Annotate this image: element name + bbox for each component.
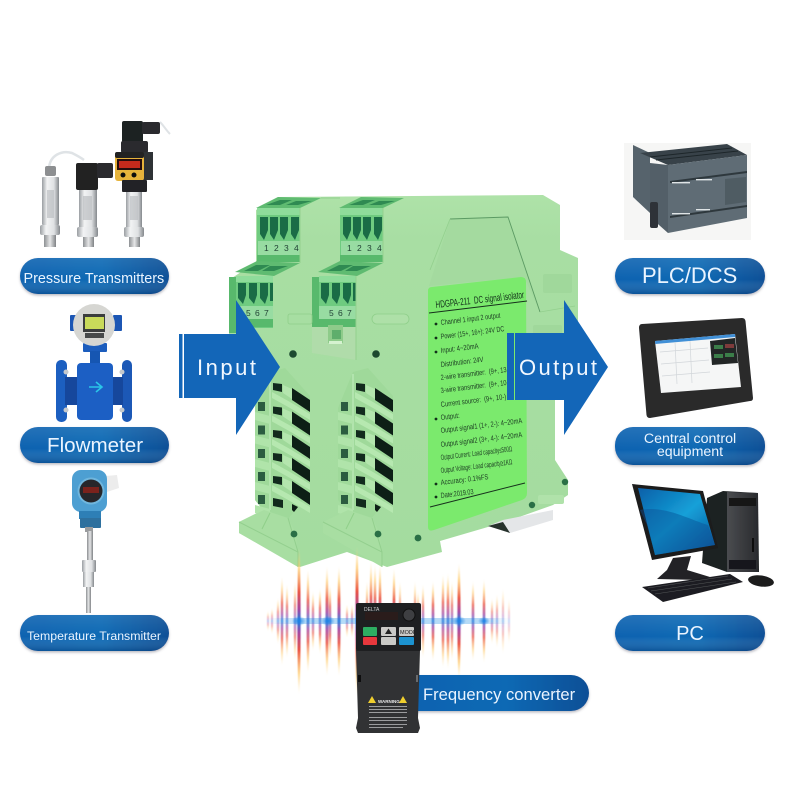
specification text: Output signal1 (1+, 2-): 4~20mA xyxy=(440,416,523,435)
specification text: Power (15+, 16+): 24V DC xyxy=(440,324,505,341)
device body silhouette xyxy=(229,195,578,567)
panel edge lines xyxy=(300,198,383,360)
arrow: input: Input xyxy=(197,355,256,380)
icon: frequency converter xyxy=(356,603,421,733)
label: frequency converter xyxy=(405,675,589,711)
specification text: Channel 1 input 2 output xyxy=(440,311,501,327)
icon: frequency converter: MODE xyxy=(400,630,417,636)
chart: interference waveform xyxy=(267,546,510,696)
connector 5-7, module 2: 7 xyxy=(347,308,352,318)
label: central control equipment xyxy=(615,427,765,465)
icon: frequency converter: WARNING xyxy=(378,699,400,704)
label: pressure transmitters: Pressure Transmitters xyxy=(24,271,164,287)
arrow: input xyxy=(179,300,280,435)
connector 1-4, module 2 xyxy=(339,197,404,262)
label: flowmeter xyxy=(20,427,169,463)
label: PLC/DCS xyxy=(615,258,765,294)
connector 5-7, module 2: 5 xyxy=(329,308,334,318)
slot shadow xyxy=(488,522,510,533)
icon: desktop PC xyxy=(632,484,775,602)
connector 1-4, module 1: 1 xyxy=(264,243,269,253)
specification text: 2-wire transmitter: (9+, 13-) xyxy=(440,364,511,382)
label: PLC/DCS: PLC/DCS xyxy=(642,263,737,288)
connector 5-7, module 1: 7 xyxy=(264,308,269,318)
label: PC xyxy=(615,615,765,651)
arrow: output: Output xyxy=(519,355,597,380)
connector 1-4, module 2: 3 xyxy=(367,243,372,253)
label title: HDGPA-211 DC signal isolator xyxy=(435,290,525,311)
specification text: Input: 4~20mA xyxy=(440,341,479,355)
recess above label xyxy=(429,217,575,312)
connector 1-4, module 1: 2 xyxy=(274,243,279,253)
metal DIN clip xyxy=(488,510,553,533)
specification text xyxy=(440,311,523,500)
connector 1-4, module 1 xyxy=(256,197,321,262)
specification text: Date:2019.03 xyxy=(440,487,474,500)
specification text: Output Current: Load capacity≤500Ω xyxy=(440,444,513,462)
specification text: Accuracy: 0.1%FS xyxy=(440,472,489,487)
foot, module 2 xyxy=(323,510,382,567)
connector 5-7, module 1: 5 xyxy=(246,308,251,318)
vent slats, module 2 xyxy=(338,368,393,519)
arrow: output xyxy=(507,300,608,435)
specification text: Output Voltage: Load capacity≥1KΩ xyxy=(440,457,513,475)
module 2 latch block xyxy=(312,325,356,360)
label: central control equipment: Central control xyxy=(644,431,736,447)
connector 5-7, module 2: 6 xyxy=(338,308,343,318)
product label with specifications xyxy=(428,277,527,531)
label: temperature transmitter: Temperature Transmitter xyxy=(27,629,161,643)
icon: frequency converter: DELTA xyxy=(364,607,380,613)
vent slats, module 1 xyxy=(255,368,310,519)
side slots and mounting holes xyxy=(288,274,572,541)
specification text: Output signal2 (3+, 4-): 4~20mA xyxy=(440,430,523,449)
bullet points xyxy=(435,323,437,498)
icon: central control touch panel xyxy=(639,318,753,418)
connector 1-4, module 2: 4 xyxy=(377,243,382,253)
label: flowmeter: Flowmeter xyxy=(47,434,143,457)
specification text: Distribution: 24V xyxy=(440,355,484,369)
connector 1-4, module 2: 2 xyxy=(357,243,362,253)
connector 5-7, module 1: 6 xyxy=(255,308,260,318)
connector 5-7, module 2 xyxy=(312,261,383,333)
label: pressure transmitters xyxy=(20,258,169,294)
icon: temperature transmitter xyxy=(72,470,119,613)
foot, module 1 xyxy=(239,510,298,567)
specification text: 3-wire transmitter: (9+, 10-) xyxy=(440,377,511,395)
label: temperature transmitter xyxy=(20,615,169,651)
label: PC: PC xyxy=(676,623,704,645)
connector 1-4, module 1: 4 xyxy=(294,243,299,253)
connector 1-4, module 1: 3 xyxy=(284,243,289,253)
connector 1-4, module 2: 1 xyxy=(347,243,352,253)
specification text: Current source: (9+, 10-) xyxy=(440,392,507,409)
label: central control equipment: equipment xyxy=(657,444,723,460)
icon: pressure transmitters xyxy=(40,121,170,247)
connector 5-7, module 1 xyxy=(229,261,300,333)
icon: flowmeter xyxy=(56,304,132,422)
device: DC signal isolator modules xyxy=(229,195,578,567)
icon: PLC xyxy=(624,143,751,240)
label: frequency converter: Frequency converter xyxy=(423,685,576,704)
specification text: Output: xyxy=(440,411,460,422)
